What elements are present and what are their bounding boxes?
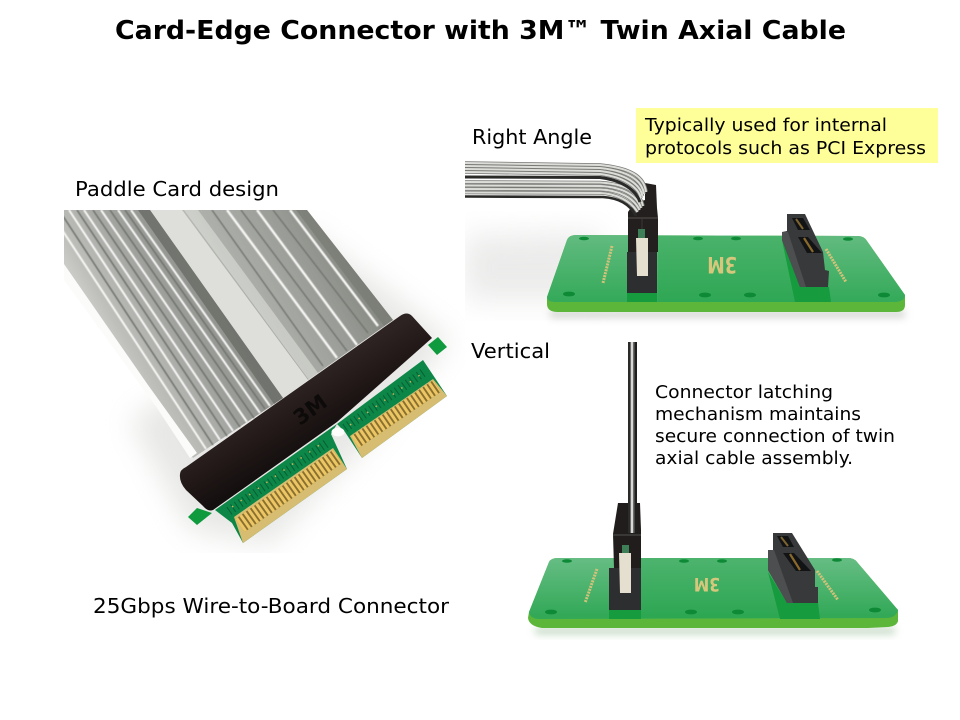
- green circuit board: [547, 235, 905, 312]
- mated vertical connector: [609, 503, 641, 610]
- heading: right angle: Right Angle: [472, 125, 592, 149]
- 3M board logo: 3M: [694, 573, 720, 594]
- callout: typical use: protocols such as PCI Express: [645, 138, 926, 159]
- left gold edge fingers: [215, 424, 347, 543]
- callout: typical use: [636, 108, 938, 163]
- text: latching mechanism note: axial cable assembly.: [655, 448, 853, 469]
- text: latching mechanism note: Connector latching: [655, 382, 833, 403]
- mated right angle connector: [627, 183, 658, 293]
- soft shadow: [465, 232, 600, 300]
- board connector socket: [782, 214, 829, 287]
- 3M board logo: 3M: [707, 251, 737, 277]
- photo: right angle connector on board: [465, 163, 905, 318]
- embossed 3M logo: 3M: [289, 390, 332, 430]
- photo: vertical connector on board: [528, 342, 898, 634]
- caption: 25Gbps wire-to-board connector: 25Gbps Wire-to-Board Connector: [93, 594, 450, 618]
- title: Card-Edge Connector with 3M™ Twin Axial Cable: [115, 16, 846, 46]
- black connector housing: [180, 314, 432, 510]
- heading: vertical: Vertical: [471, 339, 550, 363]
- text: latching mechanism note: mechanism maintains: [655, 404, 861, 425]
- twin axial ribbon cable: [465, 163, 646, 216]
- text: latching mechanism note: secure connection of twin: [655, 426, 895, 447]
- gap between ribbons: [150, 210, 308, 398]
- board connector socket: [768, 533, 818, 603]
- soft shadow: [130, 225, 450, 545]
- left ribbon cable: [49, 210, 283, 458]
- green tabs: [188, 337, 447, 525]
- photo: paddle card connector: [49, 210, 450, 545]
- soft shadow: [535, 628, 895, 634]
- right gold edge fingers: [337, 360, 447, 458]
- heading: paddle card design: Paddle Card design: [75, 177, 279, 201]
- text: latching mechanism note: [655, 382, 895, 469]
- board notch: [332, 428, 344, 436]
- right ribbon cable: [182, 210, 393, 380]
- green circuit board: [528, 558, 898, 628]
- vertical twin axial cable: [628, 342, 637, 533]
- callout: typical use: Typically used for internal: [644, 115, 887, 136]
